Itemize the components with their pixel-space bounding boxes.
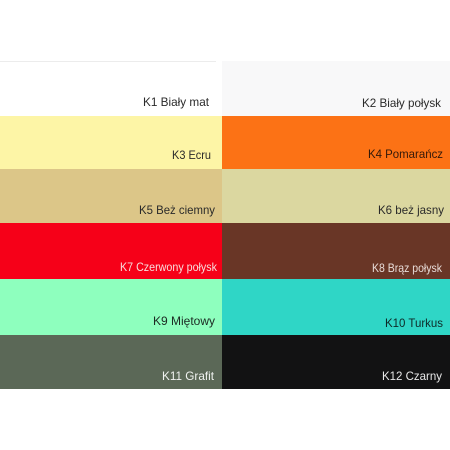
swatch: K10 turquoise: K10 Turkus bbox=[385, 316, 443, 330]
swatch: K12 black: K12 Czarny bbox=[382, 369, 442, 383]
swatch: K8 bronze gloss: K8 Brąz połysk bbox=[372, 261, 443, 275]
swatch: K7 red gloss bbox=[0, 223, 222, 279]
swatch: K6 light beige bbox=[222, 169, 450, 223]
swatch: K11 graphite bbox=[0, 335, 222, 389]
swatch: K2 white gloss: K2 Biały połysk bbox=[362, 96, 442, 110]
swatch: K4 orange bbox=[222, 116, 450, 169]
swatch: K9 mint: K9 Miętowy bbox=[153, 314, 215, 328]
swatch: K6 light beige: K6 beż jasny bbox=[378, 203, 444, 217]
swatch: K10 turquoise bbox=[222, 279, 450, 335]
swatch: K8 bronze gloss bbox=[222, 223, 450, 279]
swatch: K7 red gloss: K7 Czerwony połysk bbox=[120, 260, 218, 274]
swatch: K4 orange: K4 Pomarańcz bbox=[368, 147, 443, 161]
swatch: K2 white gloss bbox=[222, 61, 450, 116]
swatch: K1 white matte: K1 Biały mat bbox=[143, 95, 210, 109]
swatch: K5 dark beige: K5 Beż ciemny bbox=[139, 203, 215, 217]
swatch: K3 ecru: K3 Ecru bbox=[172, 148, 211, 162]
swatch: K9 mint bbox=[0, 279, 222, 335]
swatch: K3 ecru bbox=[0, 116, 222, 169]
swatch: K11 graphite: K11 Grafit bbox=[162, 369, 215, 383]
swatch: K1 white matte bbox=[0, 62, 222, 116]
swatch: K5 dark beige bbox=[0, 169, 222, 223]
swatch: K12 black bbox=[222, 335, 450, 389]
